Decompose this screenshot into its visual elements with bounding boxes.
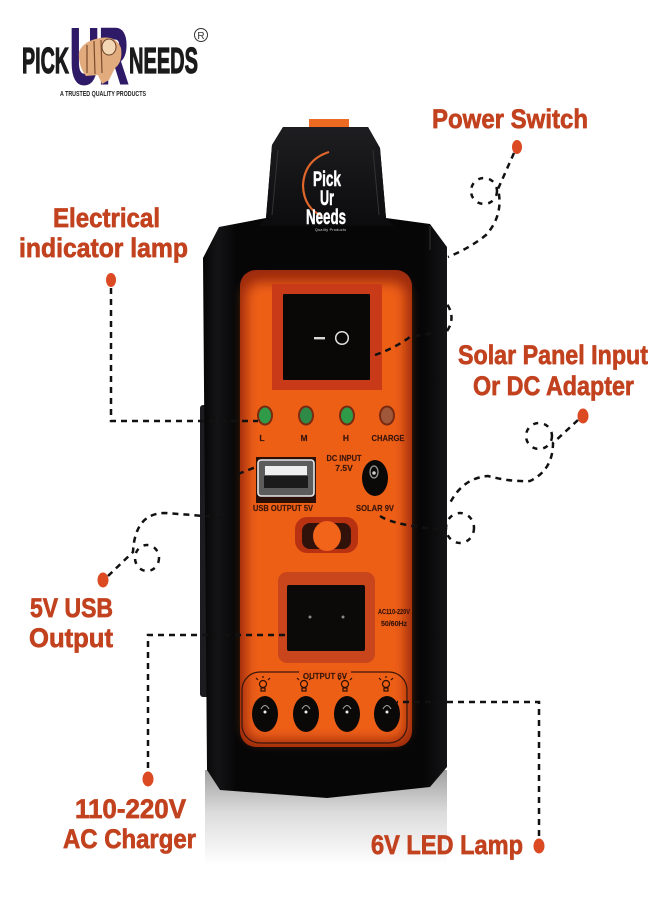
heading: 6V LED Lamp bbox=[371, 830, 523, 860]
registered mark bbox=[194, 28, 208, 42]
icon: pointing fist bbox=[79, 37, 121, 84]
output label backing bbox=[299, 670, 351, 675]
marker dot bbox=[98, 572, 108, 588]
USB port bbox=[256, 457, 316, 503]
slider knob bbox=[313, 521, 341, 551]
DC input label: 7.5V bbox=[335, 463, 353, 473]
logo word Pick: Pick bbox=[313, 168, 341, 191]
marker dot bbox=[578, 408, 588, 424]
lamp L bbox=[257, 406, 273, 426]
heading line 2: Or DC Adapter bbox=[473, 371, 634, 401]
label L: L bbox=[259, 433, 265, 443]
leader into solar jack bbox=[380, 516, 447, 530]
DC jack bbox=[362, 460, 388, 496]
leader line bbox=[111, 288, 258, 421]
label H: H bbox=[343, 433, 349, 443]
lamp M bbox=[298, 406, 314, 426]
callout: 110-220V AC Charger bbox=[63, 635, 287, 854]
logo tagline small: Quality Products bbox=[315, 228, 346, 232]
lamp charge bbox=[379, 406, 395, 426]
switch circle mark bbox=[336, 332, 348, 344]
side grip bbox=[200, 405, 210, 697]
jack 2 bbox=[293, 696, 319, 732]
bulb icon 2 bbox=[297, 676, 311, 691]
lamp H bbox=[339, 406, 355, 426]
marker dot bbox=[534, 838, 544, 854]
leader line bbox=[448, 153, 514, 257]
callout: Power Switch bbox=[375, 104, 588, 355]
logo arc bbox=[303, 152, 329, 216]
solar label: SOLAR 9V bbox=[356, 503, 394, 513]
DC input label: DC INPUT bbox=[326, 453, 362, 463]
logo tagline: A TRUSTED QUALITY PRODUCTS bbox=[60, 91, 146, 98]
leader line bbox=[449, 420, 578, 505]
heading line 2: Output bbox=[29, 623, 113, 653]
socket pin left bbox=[308, 616, 312, 618]
floor reflection bbox=[205, 770, 447, 865]
jack 1 bbox=[252, 696, 278, 732]
marker dot bbox=[512, 140, 522, 154]
AC rating label bbox=[378, 609, 410, 628]
AC rating label: 50/60Hz bbox=[381, 621, 408, 628]
bulb icon 4 bbox=[379, 676, 393, 691]
heading line 2: AC Charger bbox=[63, 824, 196, 854]
jack 3 bbox=[334, 696, 360, 732]
leader line bbox=[397, 702, 539, 836]
logo word Ur: Ur bbox=[320, 187, 334, 210]
panel base bbox=[240, 270, 412, 747]
lamp labels bbox=[259, 433, 405, 443]
rocker switch bbox=[272, 284, 382, 390]
heading line 1: 110-220V bbox=[75, 794, 186, 824]
label M: M bbox=[300, 433, 308, 443]
logo word NEEDS: NEEDS bbox=[129, 40, 198, 81]
switch face bbox=[283, 294, 370, 380]
registered mark: R bbox=[197, 31, 205, 42]
bulb icon 1 bbox=[256, 676, 270, 691]
USB shell bbox=[258, 460, 314, 496]
callout: 6V LED Lamp bbox=[371, 702, 544, 860]
AC rating label: AC110-220V bbox=[378, 609, 410, 616]
leader line bbox=[108, 513, 225, 576]
slider track bbox=[302, 523, 351, 549]
heading line 1: Electrical bbox=[53, 203, 160, 233]
USB recess bbox=[256, 457, 316, 503]
marker dot bbox=[142, 772, 154, 786]
logo: Pick Ur Needs bbox=[22, 12, 208, 100]
heading line 1: 5V USB bbox=[30, 593, 113, 623]
logo letters UR: UR bbox=[70, 12, 128, 100]
indicator lamps bbox=[257, 406, 395, 426]
socket bezel bbox=[278, 572, 375, 663]
USB cavity bbox=[264, 476, 308, 488]
logo word PICK: PICK bbox=[22, 40, 69, 81]
leader loop bbox=[135, 545, 159, 571]
callout: 5V USB Output bbox=[29, 467, 256, 653]
leader loop bbox=[471, 178, 497, 204]
callout: Solar Panel Input Or DC Adapter bbox=[380, 340, 648, 543]
USB label: USB OUTPUT 5V bbox=[253, 503, 313, 513]
marker dot bbox=[106, 273, 116, 287]
panel glow bbox=[246, 282, 406, 740]
output outline bbox=[242, 672, 407, 743]
switch dash mark bbox=[314, 337, 325, 339]
handle bbox=[258, 127, 394, 226]
logo word Needs: Needs bbox=[306, 206, 346, 229]
switch bezel bbox=[272, 284, 382, 390]
leader into switch bbox=[375, 304, 452, 355]
callout: Electrical indicator lamp bbox=[19, 203, 258, 421]
device body bbox=[203, 127, 447, 798]
lower loop bbox=[446, 513, 474, 543]
label CHARGE: CHARGE bbox=[372, 433, 405, 443]
USB tongue bbox=[265, 466, 307, 475]
handle highlight lines bbox=[272, 150, 430, 250]
output label: OUTPUT 6V bbox=[303, 671, 347, 681]
DC input label bbox=[326, 453, 362, 473]
top orange button bbox=[309, 119, 349, 129]
control panel bbox=[240, 270, 412, 747]
leader line bbox=[148, 635, 287, 768]
output 6V group bbox=[242, 670, 407, 743]
socket face bbox=[287, 585, 365, 651]
device: solar power unit bbox=[200, 119, 447, 798]
leader into USB port bbox=[238, 467, 256, 474]
handle logo bbox=[303, 152, 346, 232]
jack 4 bbox=[374, 696, 400, 732]
AC socket bbox=[278, 572, 375, 663]
bulb icon 3 bbox=[338, 676, 352, 691]
slider bezel bbox=[295, 517, 358, 553]
slider switch bbox=[295, 517, 358, 553]
upper loop bbox=[526, 423, 552, 449]
heading: Power Switch bbox=[432, 104, 588, 134]
heading line 2: indicator lamp bbox=[19, 233, 188, 263]
socket pin right bbox=[342, 616, 344, 618]
